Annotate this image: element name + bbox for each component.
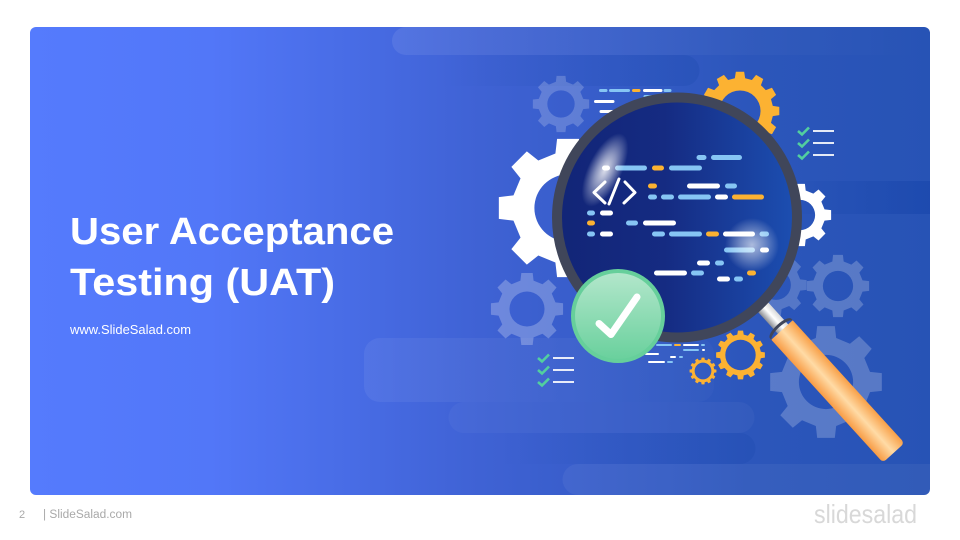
handle grip [767, 315, 904, 463]
magnifier handle [757, 301, 904, 463]
gear: orange medium [716, 331, 765, 379]
website subtitle: www.SlideSalad.com [69, 322, 191, 337]
handle neck [757, 301, 789, 334]
code lines above lens [596, 90, 670, 112]
magnifier lens [557, 98, 797, 338]
gear: left translucent [491, 273, 563, 345]
footer logo: slidesalad [814, 499, 917, 529]
gear: large white [499, 139, 637, 277]
gear: right translucent [807, 255, 869, 317]
title [70, 211, 394, 304]
title: Testing (UAT) [70, 262, 335, 304]
icon: code brackets [594, 179, 635, 204]
page number: 2 [19, 509, 25, 521]
lens glare [582, 134, 778, 270]
gear: orange small [690, 358, 716, 384]
gear: orange top [701, 72, 779, 150]
lens rim [557, 98, 797, 338]
gear: top translucent [533, 76, 589, 132]
gear: small white right [769, 184, 831, 246]
checklist: top right [798, 128, 834, 158]
checklist: lower left [538, 354, 574, 386]
code lines below lens [646, 345, 704, 362]
check badge [573, 271, 663, 361]
icon: check mark [599, 297, 637, 334]
footer site link: | SlideSalad.com [43, 509, 132, 521]
code lines in lens [590, 158, 766, 279]
gear: behind lens translucent [745, 254, 807, 316]
title: User Acceptance [70, 211, 394, 253]
gear: large lower translucent [770, 326, 882, 438]
background bars [364, 27, 930, 495]
